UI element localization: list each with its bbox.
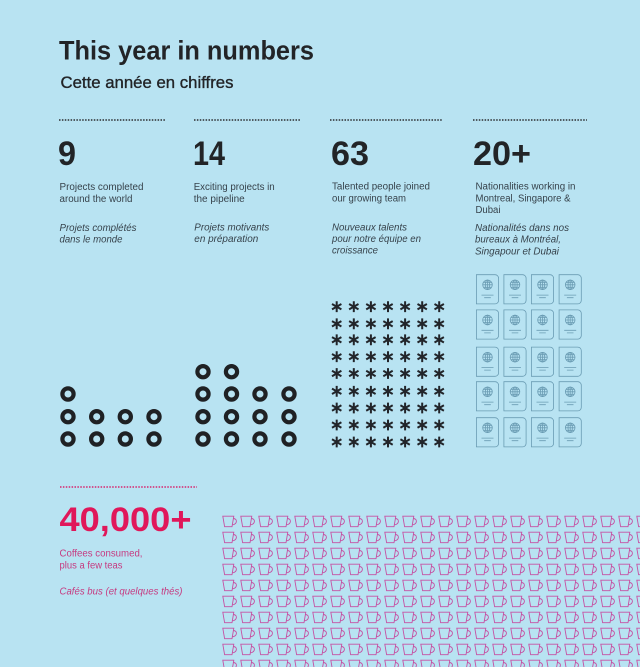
- panel: projects in the pipeline: [193, 120, 300, 445]
- english description: Nationalities working in: [476, 182, 576, 193]
- french description: Singapour et Dubai: [475, 246, 560, 257]
- mug icons: [223, 516, 640, 667]
- passport icons: 20: [476, 275, 581, 447]
- number: 40,000+: 40,000+: [60, 501, 192, 539]
- english description: the pipeline: [194, 194, 245, 205]
- english description: Dubai: [476, 205, 500, 216]
- english description: [60, 182, 144, 205]
- ring icons: 9: [62, 388, 160, 445]
- panel: coffees: [60, 487, 640, 667]
- french description: pour notre équipe en: [331, 234, 421, 245]
- title: This year in numbers: [59, 36, 314, 66]
- english description: Montreal, Singapore &: [476, 194, 571, 204]
- number: 14: 14: [193, 135, 225, 173]
- panel: nationalities: [473, 120, 587, 447]
- french description: Nationalités dans nos: [475, 223, 569, 234]
- french description: bureaux à Montréal,: [475, 235, 561, 246]
- english description: [60, 549, 142, 571]
- english description: around the world: [60, 194, 132, 205]
- number: 9: 9: [58, 135, 76, 173]
- english description: Talented people joined: [332, 182, 430, 193]
- french description: [60, 223, 136, 246]
- french description: [331, 222, 421, 257]
- english description: Exciting projects in: [194, 182, 275, 193]
- french description: Cafés bus (et quelques thés): [60, 586, 182, 598]
- french description: dans le monde: [60, 234, 123, 246]
- ring icons: 14: [197, 366, 295, 445]
- french description: en préparation: [194, 234, 259, 245]
- french description: Nouveaux talents: [332, 222, 407, 234]
- english description: our growing team: [332, 194, 406, 204]
- french description: Projets motivants: [194, 222, 269, 234]
- french description: [194, 222, 269, 245]
- english description: [332, 182, 430, 204]
- french description: [475, 223, 569, 257]
- panel: talented people: [330, 120, 444, 447]
- english description: [194, 182, 275, 205]
- french description: croissance: [332, 246, 378, 257]
- asterisk icons: 63: [332, 301, 444, 447]
- english description: [476, 182, 576, 216]
- french description: Projets complétés: [60, 223, 136, 234]
- number: 63: 63: [331, 135, 369, 173]
- subtitle: Cette année en chiffres: [60, 73, 234, 92]
- number: 20+: 20+: [473, 135, 531, 173]
- english description: Projects completed: [60, 182, 144, 193]
- panel: projects completed: [58, 120, 165, 445]
- english description: Coffees consumed,: [60, 549, 142, 560]
- english description: plus a few teas: [60, 560, 122, 571]
